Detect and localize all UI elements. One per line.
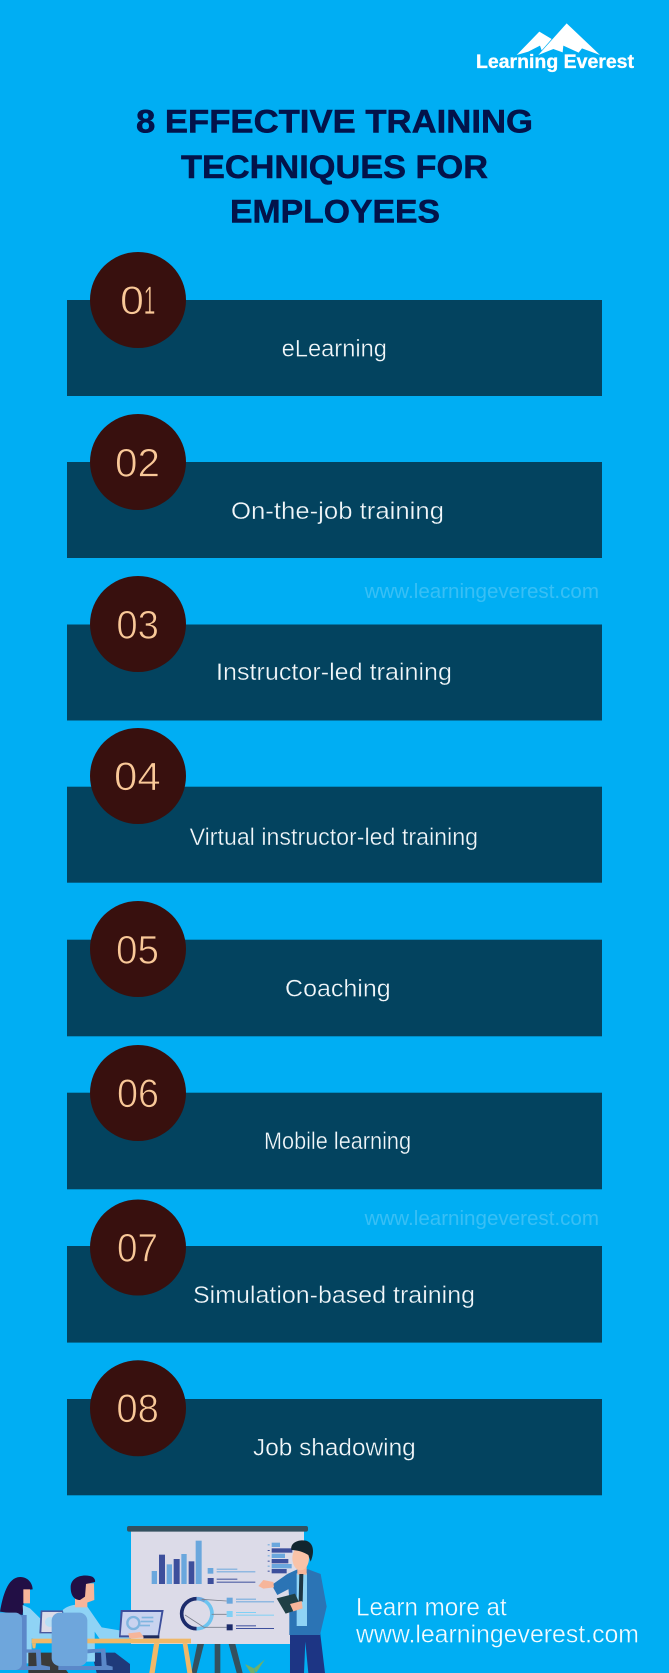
horizontal bar chart — [268, 1543, 292, 1573]
item 08: Job shadowing: 08 — [116, 1387, 159, 1431]
item 03: Instructor-led training: Instructor-led training — [216, 659, 452, 686]
item 06: Mobile learning — [67, 1045, 602, 1189]
item 02: On-the-job training: On-the-job training — [231, 498, 444, 525]
icon: easel legs — [191, 1644, 243, 1673]
item 06: Mobile learning: 06 — [117, 1072, 159, 1116]
item 08: Job shadowing: Job shadowing — [253, 1435, 416, 1462]
person: presenter — [258, 1540, 327, 1673]
laptop: front — [119, 1610, 164, 1639]
item 04: Virtual instructor-led training: Virtual instructor-led training — [190, 824, 478, 851]
icon: plant — [245, 1659, 265, 1673]
item 06: Mobile learning: Mobile learning — [264, 1128, 411, 1155]
logo wordmark: Learning Everest — [476, 52, 635, 73]
item 01: eLearning: eLearning — [282, 336, 387, 363]
icon: mountain peaks — [517, 23, 600, 55]
item 07: Simulation-based training: Simulation-based training — [193, 1282, 475, 1309]
bar chart — [152, 1541, 202, 1584]
item 05: Coaching: Coaching — [285, 976, 391, 1003]
person: seated man — [63, 1576, 130, 1673]
call to action: Learn more at — [356, 1593, 507, 1621]
item 05: Coaching: 05 — [116, 928, 159, 972]
item 05: Coaching — [67, 901, 602, 1036]
item 03: Instructor-led training — [67, 576, 602, 720]
table — [32, 1639, 192, 1673]
title — [136, 104, 533, 230]
item 04: Virtual instructor-led training — [67, 728, 602, 883]
item 01: eLearning — [67, 252, 602, 396]
person: seated woman — [0, 1577, 68, 1673]
donut legend — [227, 1598, 274, 1630]
title: TECHNIQUES FOR — [181, 149, 488, 185]
title: 8 EFFECTIVE TRAINING — [136, 104, 533, 140]
item 01: eLearning: 0 — [120, 279, 144, 323]
call to action — [355, 1593, 639, 1648]
chair: left — [0, 1613, 50, 1670]
item 02: On-the-job training — [67, 414, 602, 558]
watermark: website: www.learningeverest.com — [364, 581, 599, 603]
illustration: training presentation — [0, 1526, 327, 1673]
item 03: Instructor-led training: 03 — [116, 604, 159, 648]
item 02: On-the-job training: 02 — [115, 441, 160, 485]
call to action: www.learningeverest.com — [355, 1620, 639, 1648]
item 04: Virtual instructor-led training: 04 — [114, 755, 161, 799]
item 08: Job shadowing — [67, 1360, 602, 1495]
item 07: Simulation-based training — [67, 1200, 602, 1343]
logo: Learning Everest — [476, 23, 635, 73]
item 07: Simulation-based training: 07 — [117, 1227, 158, 1271]
laptop: back — [39, 1610, 63, 1633]
item 01: eLearning: 1 — [144, 279, 156, 323]
watermark: website: www.learningeverest.com — [364, 1208, 599, 1230]
donut chart — [182, 1599, 227, 1629]
chair: right — [52, 1613, 113, 1670]
title: EMPLOYEES — [230, 194, 440, 230]
presentation board — [127, 1526, 308, 1644]
bar chart legend — [208, 1568, 255, 1584]
